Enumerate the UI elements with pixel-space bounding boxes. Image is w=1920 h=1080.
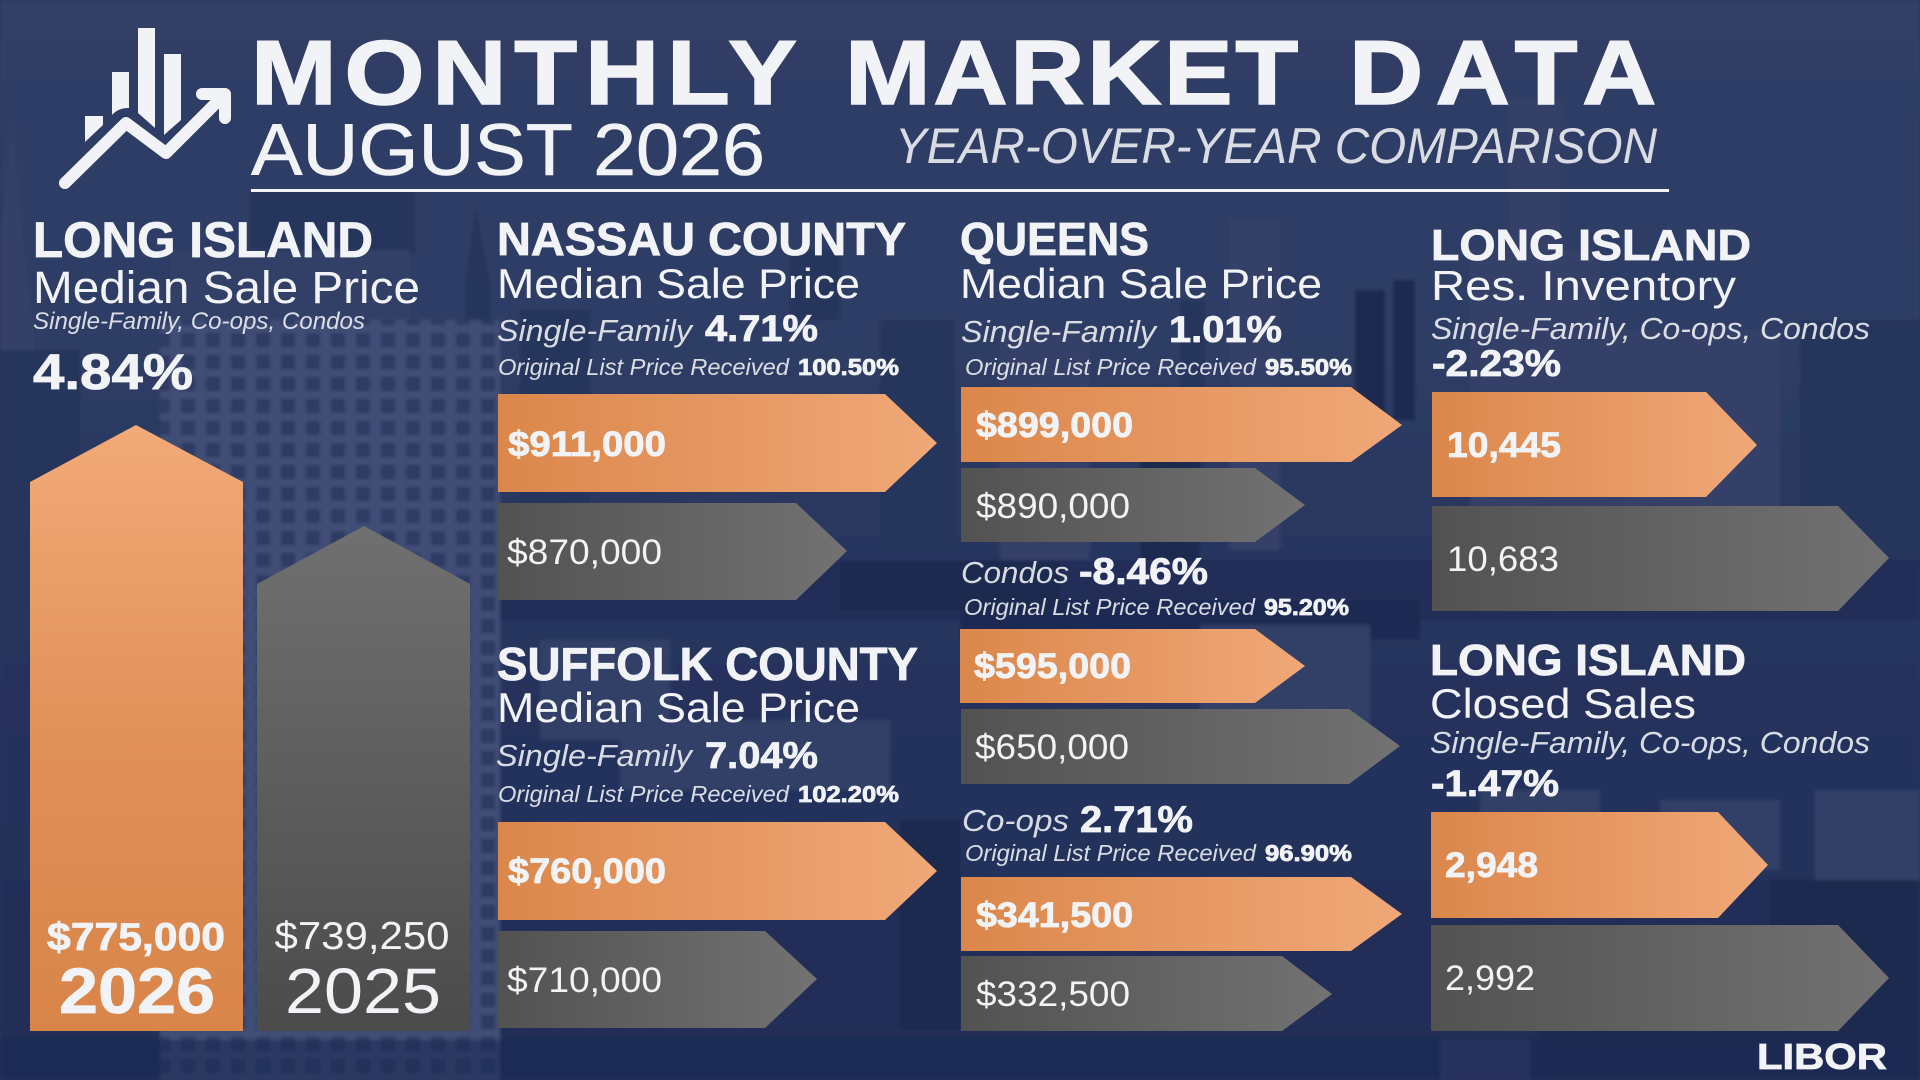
title: MARKET (845, 22, 1298, 124)
title: MONTHLY (251, 22, 797, 124)
heading: LONG ISLAND (1430, 636, 1746, 685)
panel: queens (960, 213, 1402, 1031)
single-family change (961, 309, 1282, 350)
arrow: 2025 value: 2,992 (1445, 959, 1535, 998)
arrow: single-family 2025: $890,000 (976, 487, 1130, 526)
metric name: Res. Inventory (1431, 262, 1736, 309)
change percent: -2.23% (1432, 343, 1561, 384)
bar: 2025: 2025 (285, 955, 441, 1027)
single-family change: 7.04% (705, 735, 818, 776)
heading: LONG ISLAND (33, 212, 373, 268)
original list price received: 96.90% (1265, 840, 1352, 866)
original list price received: Original List Price Received (965, 840, 1257, 866)
arrow: co-ops 2026: $341,500 (976, 896, 1133, 935)
arrow: 2026 value: $760,000 (508, 852, 666, 891)
condos change: -8.46% (1079, 551, 1208, 592)
title: DATA (1349, 22, 1656, 124)
arrow: 2026 value: 2,948 (1445, 846, 1538, 885)
arrow: single-family 2025 (961, 468, 1305, 542)
panel: long island closed sales (1430, 636, 1889, 1031)
single-family change: 1.01% (1169, 309, 1282, 350)
metric name: Median Sale Price (497, 260, 860, 307)
bar: 2026 (30, 425, 243, 1031)
single-family change (497, 308, 818, 349)
metric name: Median Sale Price (33, 262, 420, 313)
arrow: 2025 value (1432, 506, 1889, 611)
arrow: 2026 value (498, 394, 937, 492)
change percent: 4.84% (33, 344, 193, 400)
arrow: 2025 value: $870,000 (507, 533, 662, 572)
icon: rising bar chart with arrow (65, 28, 225, 183)
heading: QUEENS (960, 213, 1149, 265)
subtitle: comparison: YEAR-OVER-YEAR COMPARISON (895, 118, 1658, 174)
original list price received: Original List Price Received (965, 354, 1257, 380)
arrow: condos 2025: $650,000 (975, 728, 1129, 767)
original list price received: Original List Price Received (964, 594, 1256, 620)
arrow: 2026 value (1432, 392, 1757, 497)
arrow: 2026 value: $911,000 (508, 425, 666, 464)
bar: 2026: 2026 (59, 955, 215, 1027)
arrow: 2025 value: $710,000 (507, 961, 662, 1000)
arrow: 2025 value (1431, 925, 1889, 1031)
brand logo text: LIBOR (1757, 1036, 1887, 1077)
heading: NASSAU COUNTY (497, 213, 906, 265)
single-family change (496, 735, 818, 776)
arrow: condos 2026 (960, 629, 1305, 703)
condos change (961, 551, 1208, 592)
arrow: 2025 value: 10,683 (1447, 540, 1559, 579)
heading: LONG ISLAND (1431, 221, 1751, 270)
property types: Single-Family, Co-ops, Condos (1430, 725, 1870, 760)
arrow: co-ops 2025: $332,500 (976, 975, 1130, 1014)
original list price received: 102.20% (798, 781, 899, 807)
arrow: single-family 2026: $899,000 (976, 406, 1133, 445)
single-family change: Single-Family (497, 313, 695, 348)
co-ops change (962, 799, 1193, 840)
arrow: co-ops 2026 (961, 877, 1402, 951)
bar: 2025: $739,250 (274, 915, 450, 958)
heading: SUFFOLK COUNTY (497, 638, 918, 690)
panel: nassau county (497, 213, 937, 600)
co-ops change: Co-ops (962, 803, 1069, 838)
panel: long island residential inventory (1431, 221, 1889, 611)
metric name: Closed Sales (1430, 680, 1696, 727)
arrow: 2026 value (1431, 812, 1768, 918)
bar: 2025 (257, 526, 470, 1031)
condos change: Condos (961, 555, 1069, 590)
arrow: condos 2026: $595,000 (974, 647, 1131, 686)
metric name: Median Sale Price (960, 260, 1322, 307)
single-family change: Single-Family (496, 738, 695, 773)
arrow: 2026 value: 10,445 (1447, 426, 1561, 465)
original list price received: Original List Price Received (498, 354, 790, 380)
original list price received: 100.50% (798, 354, 899, 380)
arrow: 2025 value (498, 931, 817, 1028)
subtitle: month: AUGUST 2026 (251, 110, 765, 191)
original list price received: 95.50% (1265, 354, 1352, 380)
panel: suffolk county (496, 638, 937, 1028)
arrow: single-family 2026 (961, 387, 1402, 462)
single-family change: 4.71% (705, 308, 818, 349)
panel: long island median sale price (30, 212, 470, 1031)
arrow: 2025 value (498, 503, 847, 600)
property types: Single-Family, Co-ops, Condos (1431, 311, 1870, 346)
arrow: 2026 value (498, 822, 937, 920)
arrow: condos 2025 (961, 709, 1400, 784)
co-ops change: 2.71% (1080, 799, 1193, 840)
bar: 2026: $775,000 (47, 916, 225, 959)
title (251, 22, 1656, 124)
metric name: Median Sale Price (497, 684, 860, 731)
arrow: co-ops 2025 (961, 956, 1332, 1031)
single-family change: Single-Family (961, 314, 1159, 349)
original list price received: Original List Price Received (498, 781, 790, 807)
change percent: -1.47% (1431, 763, 1559, 804)
property types: Single-Family, Co-ops, Condos (33, 308, 365, 335)
original list price received: 95.20% (1264, 594, 1349, 620)
